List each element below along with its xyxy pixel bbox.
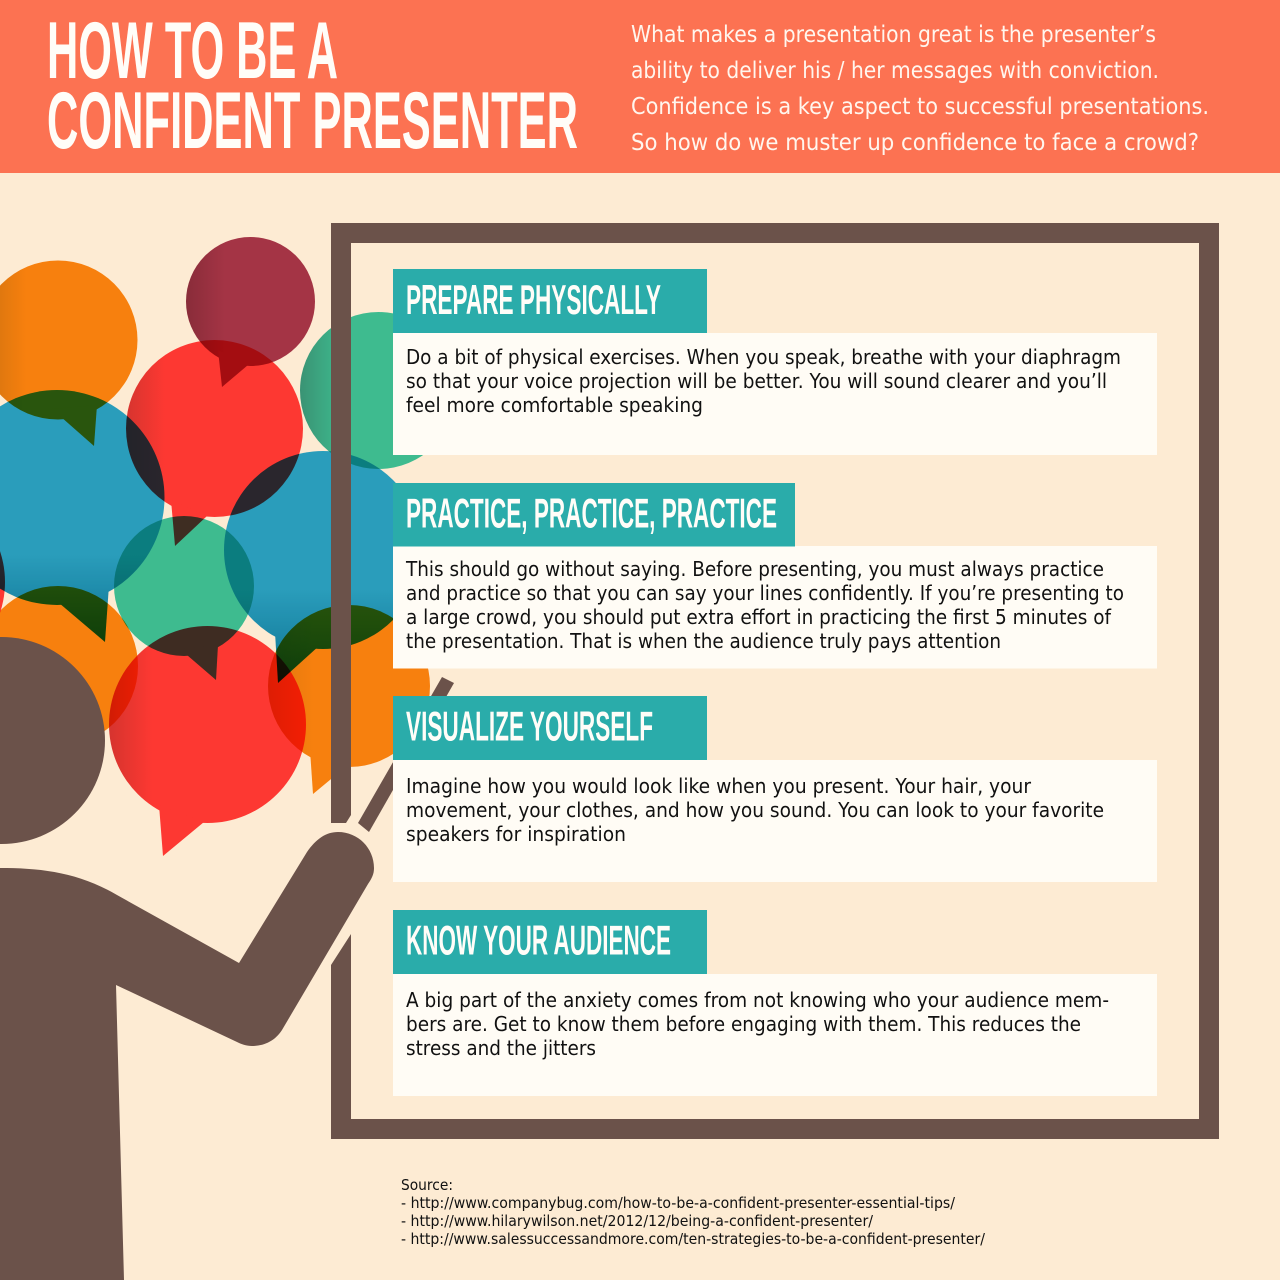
- intro text: What makes a presentation great is the presenter’s: [631, 20, 1156, 48]
- panel: prepare physically: [393, 269, 1157, 455]
- body text: so that your voice projection will be better. You will sound clearer and you’ll: [406, 369, 1107, 393]
- bubble: blue left: [0, 390, 164, 642]
- intro text: [631, 20, 1209, 156]
- body text: a large crowd, you should put extra effort in practicing the first 5 minutes of: [406, 605, 1112, 629]
- panel body: [393, 333, 1157, 455]
- body and raised arm: [0, 832, 374, 1280]
- speech bubbles cluster: [0, 237, 457, 856]
- pointer stick: [358, 677, 454, 832]
- body text: [406, 988, 1109, 1060]
- title: HOW TO BE A: [47, 6, 338, 96]
- panel body: [393, 974, 1157, 1096]
- body text: This should go without saying. Before presenting, you must always practice: [405, 557, 1104, 581]
- heading: know your audience: KNOW YOUR AUDIENCE: [406, 916, 671, 964]
- body text: [406, 345, 1121, 417]
- bubble: red lower: [109, 626, 306, 856]
- body text: speakers for inspiration: [406, 822, 626, 846]
- body text: the presentation. That is when the audience truly pays attention: [406, 629, 1001, 653]
- heading: prepare physically: PREPARE PHYSICALLY: [406, 276, 661, 323]
- body text: stress and the jitters: [406, 1036, 596, 1060]
- panel body: [393, 760, 1157, 882]
- body text: Do a bit of physical exercises. When you speak, breathe with your diaphragm: [406, 345, 1121, 369]
- body text: feel more comfortable speaking: [406, 393, 703, 417]
- bubble: orange top left: [0, 260, 138, 446]
- body text: bers are. Get to know them before engaging with them. This reduces the: [406, 1012, 1081, 1036]
- heading: visualize yourself: VISUALIZE YOURSELF: [406, 702, 653, 750]
- heading: prepare physically: [393, 269, 707, 333]
- panel: visualize yourself: [393, 696, 1157, 882]
- intro text: So how do we muster up confidence to face a crowd?: [631, 128, 1199, 156]
- head: [0, 637, 105, 844]
- header banner: [0, 0, 1280, 173]
- bubble: orange right: [268, 605, 430, 794]
- bubble: maroon top: [186, 237, 315, 387]
- bubble: green right: [300, 312, 457, 469]
- body text: [406, 774, 1104, 846]
- title: CONFIDENT PRESENTER: [47, 76, 578, 166]
- panel: know your audience: [393, 910, 1157, 1096]
- heading: visualize yourself: [393, 696, 707, 760]
- title: [47, 6, 578, 166]
- bubble: red upper: [126, 340, 303, 546]
- bubble: orange lower left: [0, 586, 138, 746]
- sources: - http://www.companybug.com/how-to-be-a-confident-presenter-essential-tips/: [401, 1194, 956, 1212]
- heading: know your audience: [393, 910, 707, 974]
- heading: practice: PRACTICE, PRACTICE, PRACTICE: [406, 490, 777, 536]
- intro text: ability to deliver his / her messages with conviction.: [631, 56, 1159, 84]
- panel: practice: [393, 483, 1157, 668]
- body text: movement, your clothes, and how you sound. You can look to your favorite: [406, 798, 1104, 822]
- sources: - http://www.salessuccessandmore.com/ten-strategies-to-be-a-confident-presenter/: [401, 1230, 986, 1248]
- heading: practice: [393, 483, 795, 546]
- presentation board frame: [331, 223, 1219, 1139]
- sources: [401, 1176, 986, 1248]
- bubble: green centre: [114, 516, 254, 680]
- body text: and practice so that you can say your lines confidently. If you’re presenting to: [406, 581, 1124, 605]
- bubble: blue right: [224, 451, 422, 683]
- intro text: Confidence is a key aspect to successful presentations.: [631, 92, 1209, 120]
- presenter figure: [0, 637, 374, 1280]
- sources: Source:: [401, 1176, 453, 1194]
- panel body: [393, 546, 1157, 668]
- body text: [405, 557, 1124, 653]
- body text: A big part of the anxiety comes from not knowing who your audience mem-: [406, 988, 1109, 1012]
- sources: - http://www.hilarywilson.net/2012/12/being-a-confident-presenter/: [401, 1212, 874, 1230]
- bubble: small red at left edge: [0, 484, 5, 680]
- body text: Imagine how you would look like when you present. Your hair, your: [406, 774, 1032, 798]
